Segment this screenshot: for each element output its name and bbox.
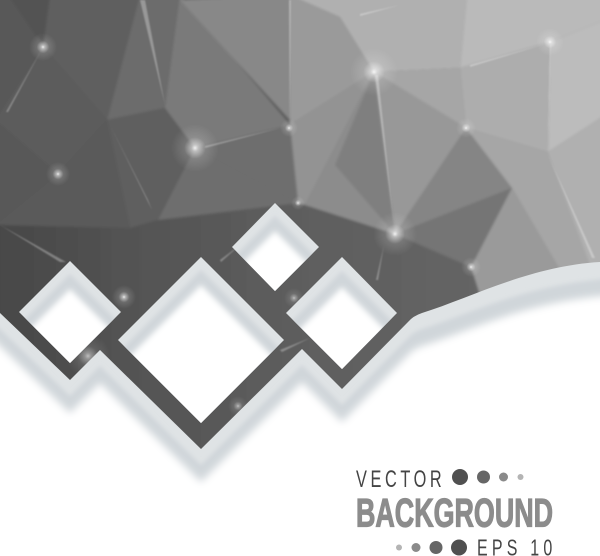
- dots beside EPS 10: [396, 540, 467, 556]
- light streaks on mesh edges: [0, 0, 595, 352]
- diamond frame: centre large: [118, 257, 284, 423]
- dots beside VECTOR: [452, 469, 524, 485]
- title: VECTOR: VECTOR: [356, 466, 445, 493]
- title: BACKGROUND: BACKGROUND: [356, 491, 553, 536]
- light glows: [29, 28, 564, 416]
- diamond frame: right: [286, 257, 397, 369]
- diamond frame: left: [19, 261, 121, 363]
- diamond frame: top: [232, 203, 319, 291]
- wavy white lower panel with frame: [0, 262, 600, 495]
